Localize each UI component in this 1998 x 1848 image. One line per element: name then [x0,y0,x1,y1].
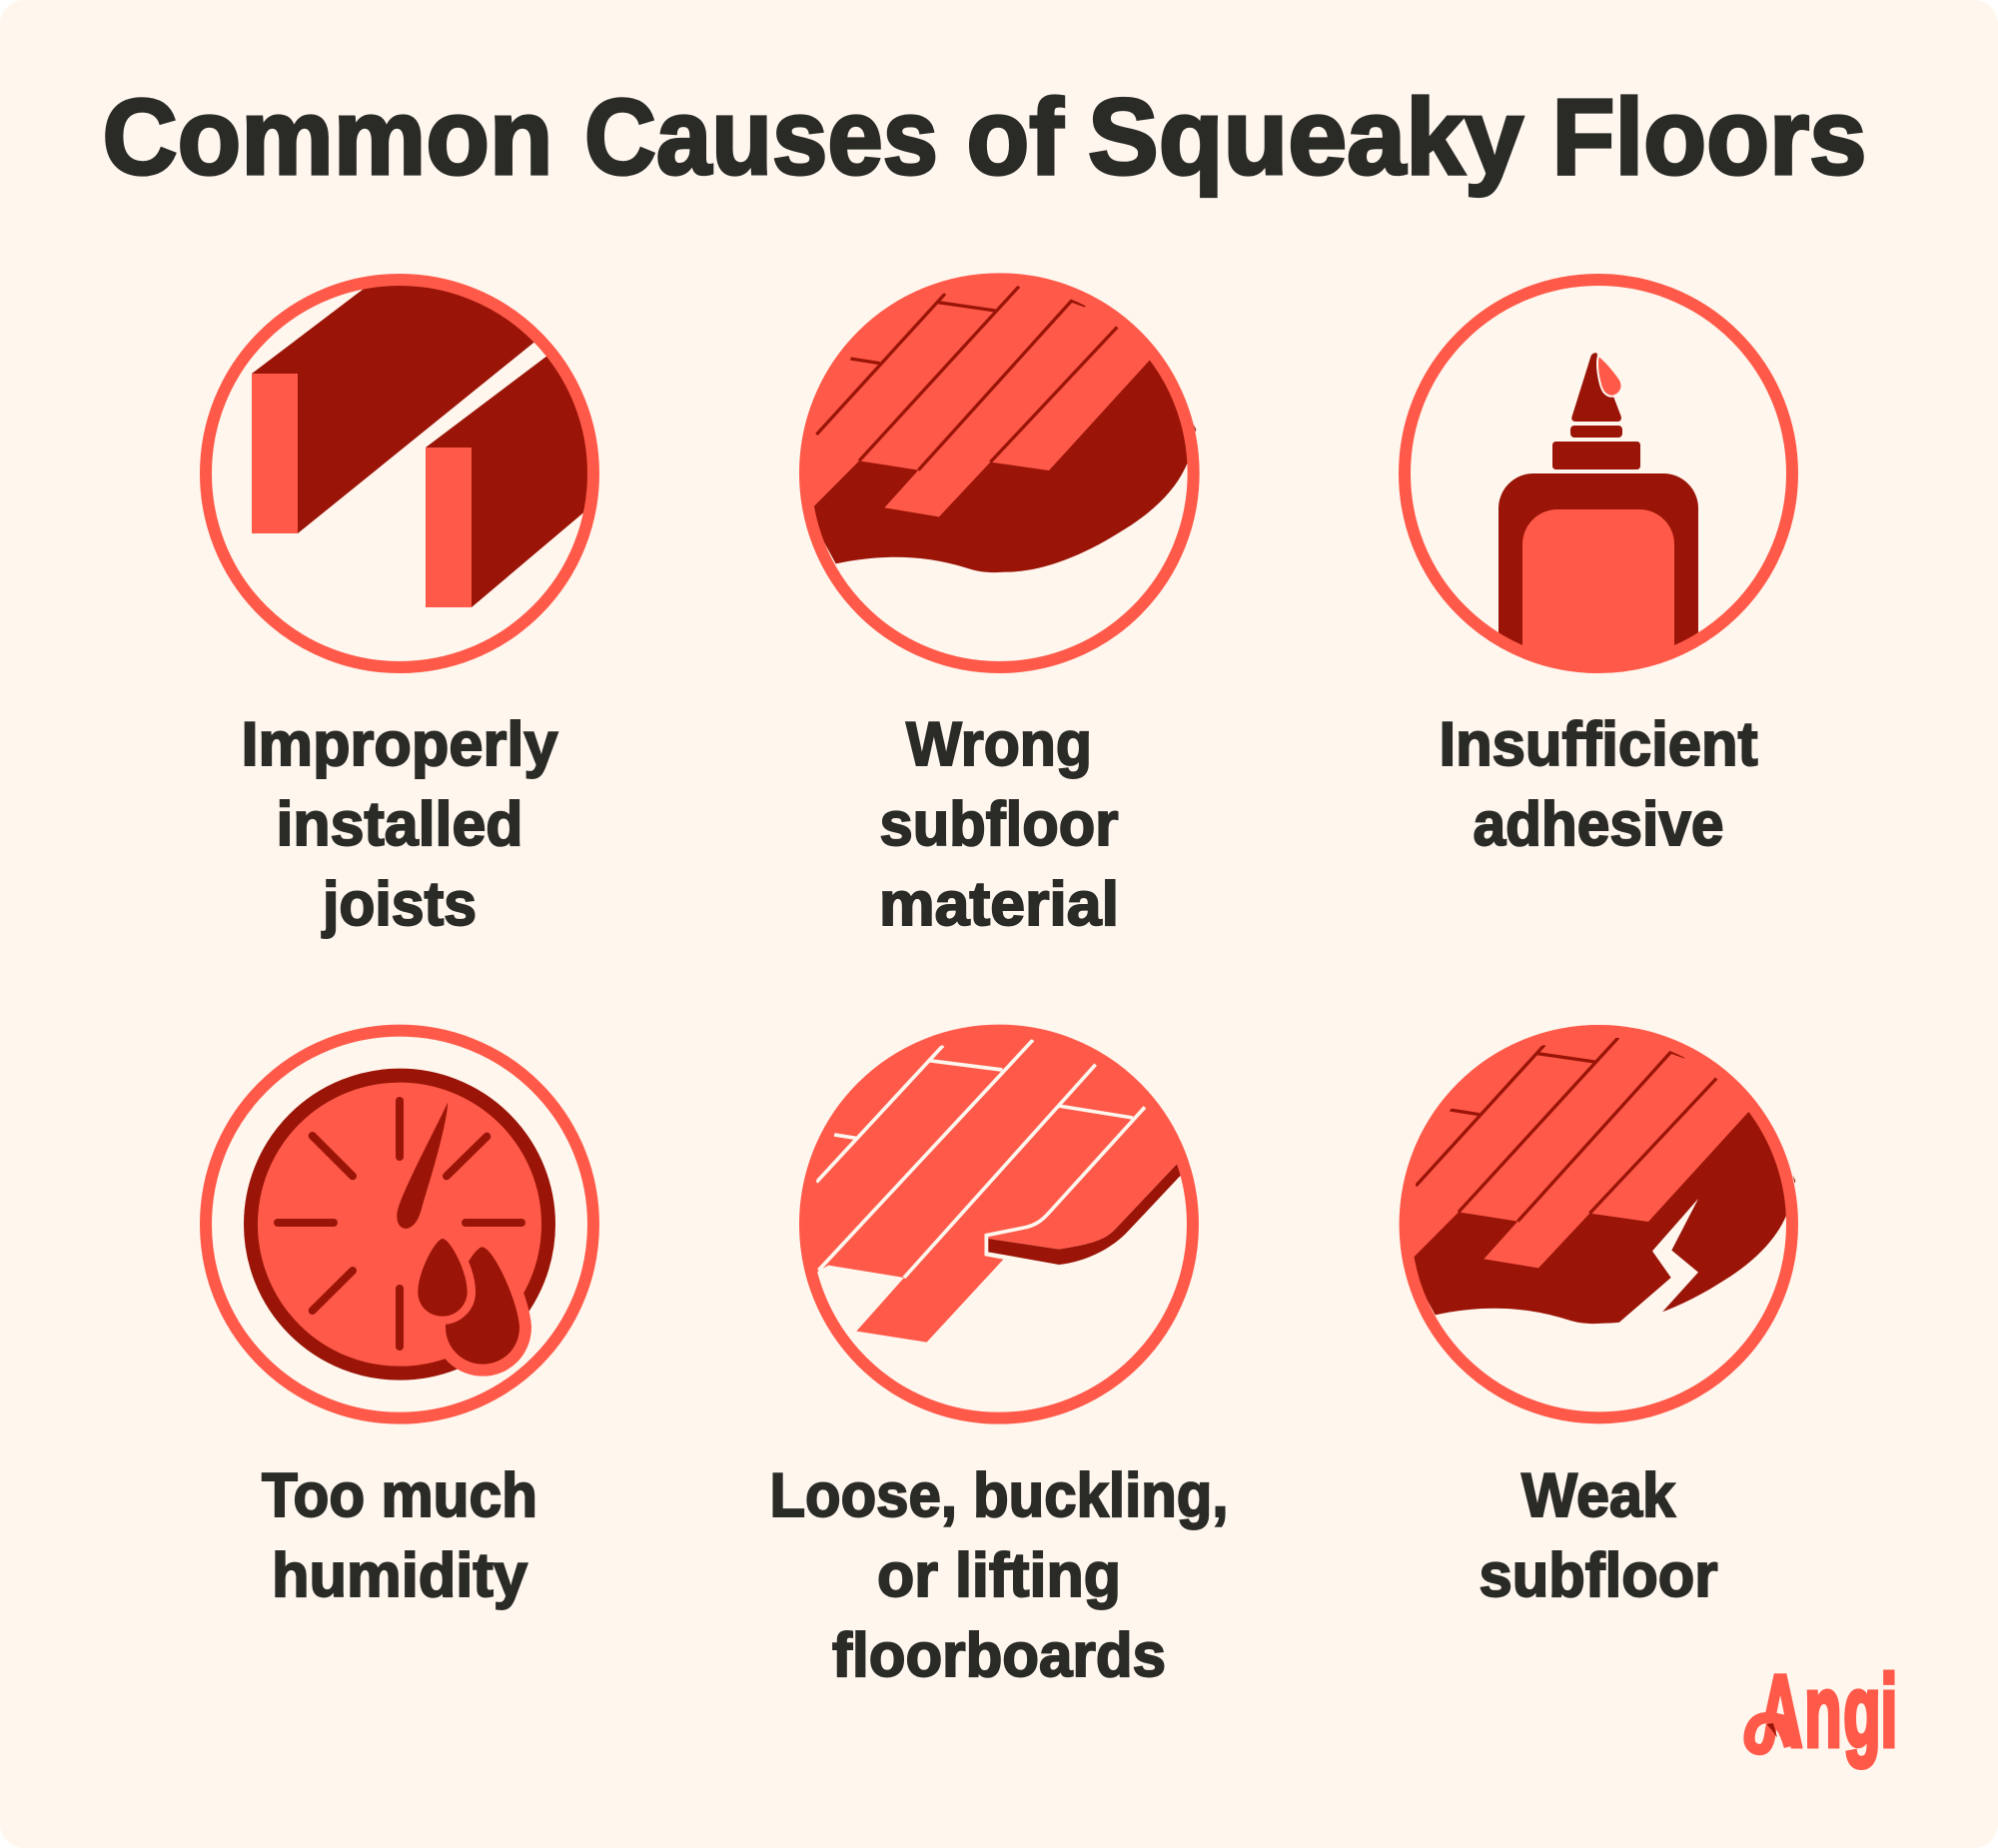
cause 3: insufficient adhesive [1405,280,1792,859]
icon: lifting floorboard [799,1025,1199,1424]
label: loose, buckling, or lifting floorboards: or lifting [877,1541,1121,1610]
icon: cracked subfloor [1399,1025,1798,1424]
label: loose, buckling, or lifting floorboards [769,1461,1229,1690]
title: Squeaky [1088,76,1523,197]
title: Common [102,76,553,197]
label: insufficient adhesive [1439,710,1758,859]
label: weak subfloor [1479,1461,1718,1610]
logo: Angi: Angi [1758,1654,1897,1768]
label: weak subfloor: subfloor [1479,1541,1718,1610]
title [102,76,1866,197]
label: improperly installed joists: installed [276,790,523,859]
title: Causes [584,76,938,197]
cause 4: too much humidity [206,1031,593,1610]
icon: humidity gauge with drops [206,1031,593,1418]
label: improperly installed joists: joists [322,870,477,939]
cause 2: wrong subfloor material [799,273,1200,927]
title: Floors [1552,76,1866,197]
label: insufficient adhesive: adhesive [1473,790,1724,859]
label: wrong subfloor material: Wrong [906,710,1092,779]
icon: floorboards over subfloor [799,273,1200,673]
cause 1: improperly installed joists [200,274,599,939]
label: too much humidity [262,1461,537,1610]
label: wrong subfloor material: subfloor [879,790,1119,859]
crack [1618,1199,1698,1323]
icon: joists [200,274,599,673]
label: loose, buckling, or lifting floorboards: floorboards [832,1621,1166,1690]
label: wrong subfloor material [879,710,1119,939]
title: of [967,76,1064,197]
label: too much humidity: humidity [272,1541,528,1610]
label: weak subfloor: Weak [1521,1461,1675,1530]
label: too much humidity: Too much [262,1461,537,1530]
cause 5: loose, buckling, or lifting floorboards [769,1004,1229,1690]
cause 6: weak subfloor [1399,1025,1798,1598]
label: loose, buckling, or lifting floorboards: Loose, buckling, [769,1461,1229,1530]
label: improperly installed joists [242,710,558,939]
label: improperly installed joists: Improperly [242,710,558,779]
icon: glue bottle [1405,280,1792,682]
label: insufficient adhesive: Insufficient [1439,710,1758,779]
label: wrong subfloor material: material [879,870,1119,939]
